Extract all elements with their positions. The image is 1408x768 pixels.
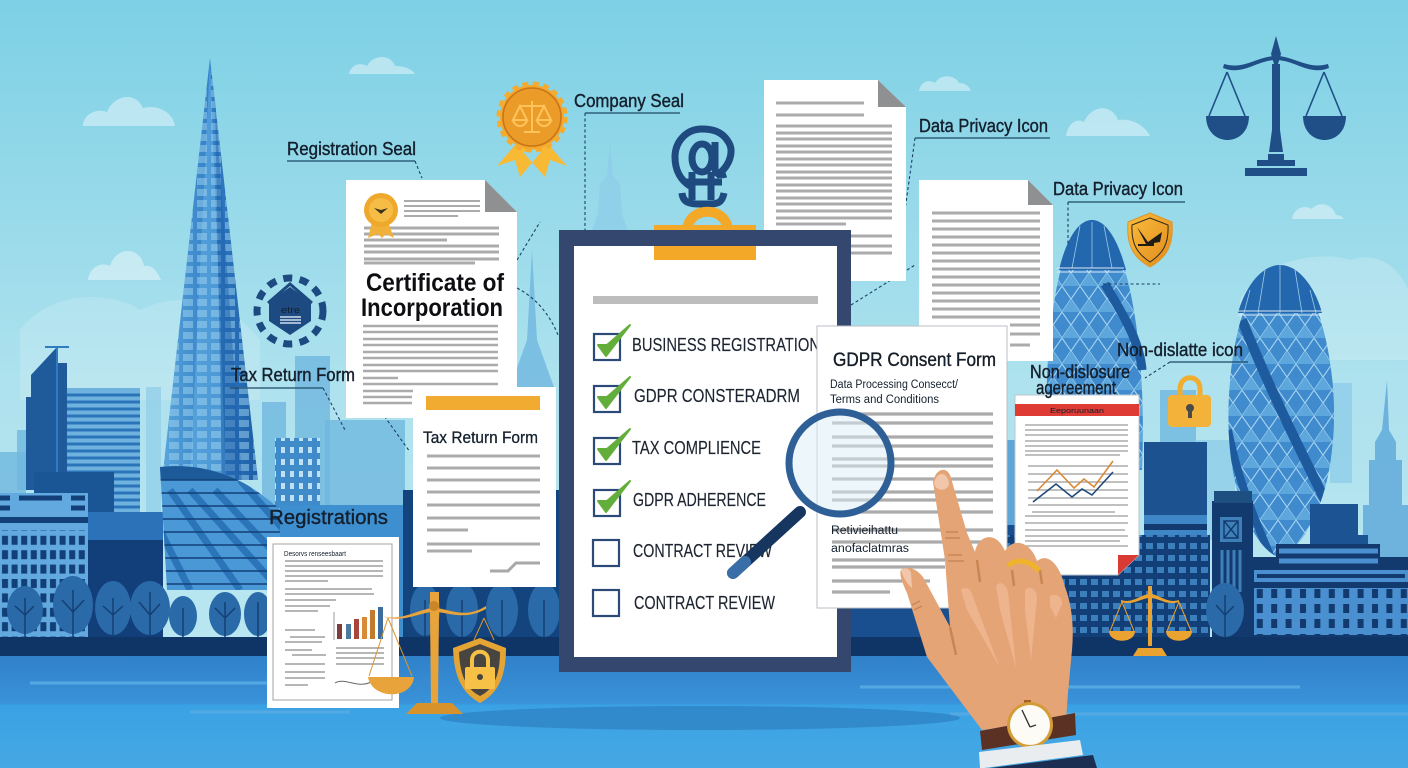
icon: data privacy shield [1128,213,1172,267]
icon: company seal gold rosette with ribbon [497,84,567,177]
checklist item 1: BUSINESS REGISTRATION [632,335,820,355]
checklist item 1 [594,325,820,360]
document: tax return form [413,387,556,587]
central and right skyline block [280,440,1210,640]
document: GDPR consent form: GDPR Consent Form [833,350,996,371]
clipboard clip back [654,212,756,233]
building: large gherkin right [1228,265,1334,565]
document: non-disclosure agreement with line chart [1015,395,1139,575]
label: Non-dislatte icon: Non-dislatte icon [1117,340,1243,360]
document: non-disclosure agreement with line chart: Eeporuunaan [1050,406,1104,415]
hand pointing [900,470,1073,730]
clipboard clip front [654,246,756,260]
icon: magnifying glass [733,412,891,573]
document: tax return form: Tax Return Form [423,428,538,447]
label: Company Seal: Company Seal [574,91,684,111]
icon: gold balance scales [368,592,494,714]
icon: gold shield with padlock [453,638,506,703]
building: Shard tower [160,58,260,480]
document: certificate of incorporation: Incorporation [361,294,503,322]
mini bar chart [334,607,383,640]
checklist item 4: GDPR ADHERENCE [633,490,766,510]
icon: blue registration badge: etre [281,305,300,315]
building: curved glass dome [160,466,280,590]
certificate title: Certificate of [366,269,505,297]
building: large gherkin left [1046,220,1143,470]
checklist item 5 [593,540,772,566]
checklist item 5: CONTRACT REVIEW [633,541,772,561]
ring [1008,561,1039,571]
dashed connector lines [323,113,1170,452]
document: top centre sheet [764,80,906,281]
shirt cuff [979,740,1097,768]
label: Registrations: Registrations [269,507,388,529]
document: right upper sheet [919,180,1053,361]
document: GDPR consent form: Retivieihattu [831,525,898,537]
right foreground buildings [1212,491,1408,640]
icon: small gold scales lower right [1109,586,1192,656]
label: Tax Return Form: Tax Return Form [231,365,355,385]
left skyline buildings [0,347,320,638]
icon: blue registration badge [257,278,323,344]
icon: small certificate seal [364,193,398,238]
checklist item 6: CONTRACT REVIEW [634,593,775,613]
checklist item 3 [594,429,761,464]
tree row [7,576,1244,637]
label: Data Privacy Icon (right): Data Privacy Icon [1053,179,1183,199]
label: Non-disclosure agreement: Non-dislosure [1030,362,1130,382]
document: certificate of incorporation [346,180,517,418]
icon: at symbol emblem above clipboard [675,129,731,204]
document: GDPR consent form: anofaclatmras [831,543,909,555]
checklist item 6 [593,590,775,616]
line chart [1033,461,1113,502]
document: registrations sheet with bar chart: Desorvs renseesbaart [284,551,346,558]
document: registrations sheet with bar chart [267,537,399,708]
icon: gold padlock [1168,378,1211,427]
clipboard panel [559,212,851,672]
checklist item 2 [594,377,800,412]
document: GDPR consent form [817,326,1007,608]
checklist item 3: TAX COMPLIENCE [632,438,761,458]
checklist heading bar [593,296,818,304]
checklist item 2: GDPR CONSTERADRM [634,386,800,406]
wristwatch [980,700,1076,750]
checklist item 4 [594,481,766,516]
label: Registration Seal: Registration Seal [287,139,416,159]
document: GDPR consent form: Terms and Conditions [830,394,939,406]
river ground [0,637,1408,768]
label: Data Privacy Icon (top): Data Privacy Icon [919,116,1048,136]
distant pale skyline [0,142,1408,565]
label: Non-disclosure agreement: agereement [1036,378,1116,398]
label: Non-disclosure agreement [1030,362,1130,398]
icon: blue scales of justice [1206,36,1346,176]
document: GDPR consent form: Data Processing Consecct/ [830,379,959,391]
clouds [20,57,1408,400]
